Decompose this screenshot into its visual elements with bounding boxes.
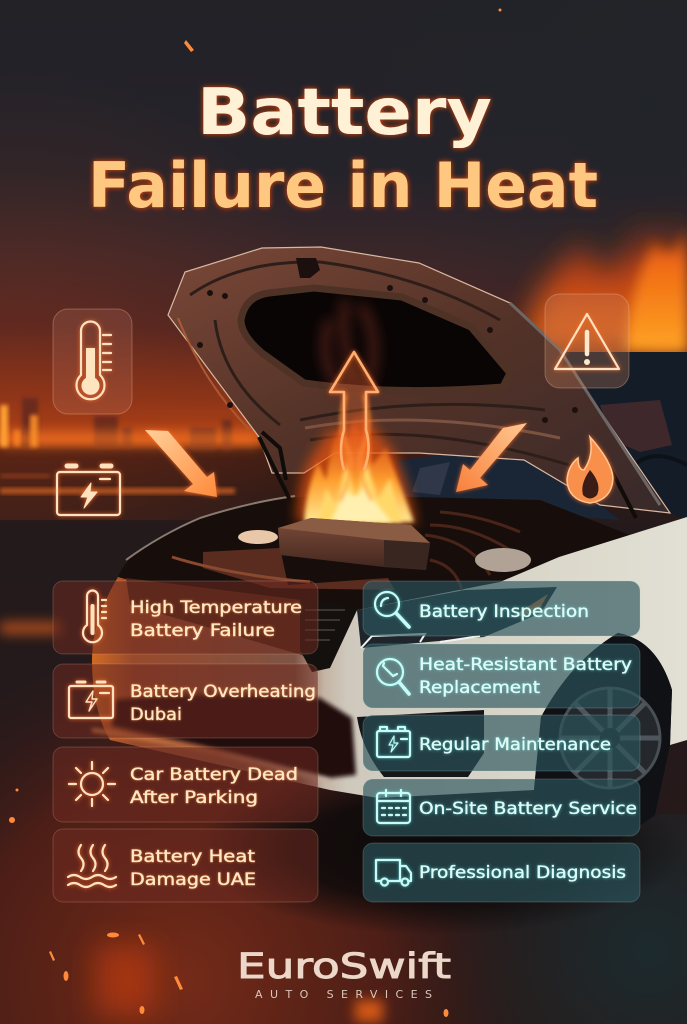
card: high temperature [53, 581, 318, 654]
card: on-site service [363, 779, 640, 836]
engine parts and battery [172, 512, 531, 590]
arrow: heat from left [145, 430, 217, 497]
cabin [398, 352, 687, 520]
logo: EuroSwift [237, 947, 451, 987]
lower intake [357, 710, 484, 777]
card: dead after parking [53, 747, 318, 822]
card: heat damage: Battery Heat [130, 847, 256, 866]
card: dead after parking: Car Battery Dead [130, 765, 298, 784]
icon: battery large [57, 466, 120, 515]
smoke inside hood opening [325, 300, 374, 395]
card: professional diagnosis: Professional Diagnosis [419, 863, 626, 882]
card: heat damage [53, 829, 318, 902]
title [88, 76, 598, 222]
panel: causes [53, 581, 318, 902]
card: regular maintenance [363, 715, 640, 771]
headlight [357, 587, 557, 648]
card: regular maintenance: Regular Maintenance [419, 735, 611, 754]
card: overheating: Dubai [130, 705, 182, 724]
panel: solutions [363, 581, 640, 902]
card: high temperature: Battery Failure [130, 621, 275, 640]
card: dead after parking: After Parking [130, 788, 258, 807]
card: overheating: Battery Overheating [130, 682, 316, 701]
body panel [92, 517, 687, 798]
logo [237, 947, 451, 1001]
card: professional diagnosis [363, 843, 640, 902]
background fire: top right [525, 215, 687, 352]
grille [300, 598, 358, 672]
card: on-site service: On-Site Battery Service [419, 799, 637, 818]
title: Failure in Heat [88, 149, 598, 222]
embers [9, 8, 502, 1022]
card: heat-resistant replacement: Heat-Resistant Battery [419, 655, 632, 674]
title: Battery [197, 76, 492, 150]
dark ground under car [195, 765, 685, 935]
card: battery inspection [363, 581, 640, 636]
card: high temperature: High Temperature [130, 598, 302, 617]
wheel [530, 633, 672, 840]
hood nose shading [126, 578, 318, 660]
card: heat-resistant replacement: Replacement [419, 678, 541, 697]
card: heat-resistant replacement [363, 644, 640, 708]
logo: AUTO SERVICES [255, 988, 432, 1001]
card: heat damage: Damage UAE [130, 870, 256, 889]
icon: thermometer tile [53, 309, 132, 414]
fender edge [126, 496, 295, 560]
arrow: heat from right [456, 423, 527, 492]
engine bay [118, 495, 630, 660]
hood [168, 247, 670, 518]
car [92, 352, 687, 840]
left bumper shadow [112, 694, 356, 778]
card: overheating [53, 664, 318, 738]
card: battery inspection: Battery Inspection [419, 602, 589, 621]
arrow: heat rising [330, 352, 378, 470]
icon: flame [567, 437, 613, 503]
flames over battery [296, 395, 416, 525]
icon: warning tile [545, 294, 629, 388]
